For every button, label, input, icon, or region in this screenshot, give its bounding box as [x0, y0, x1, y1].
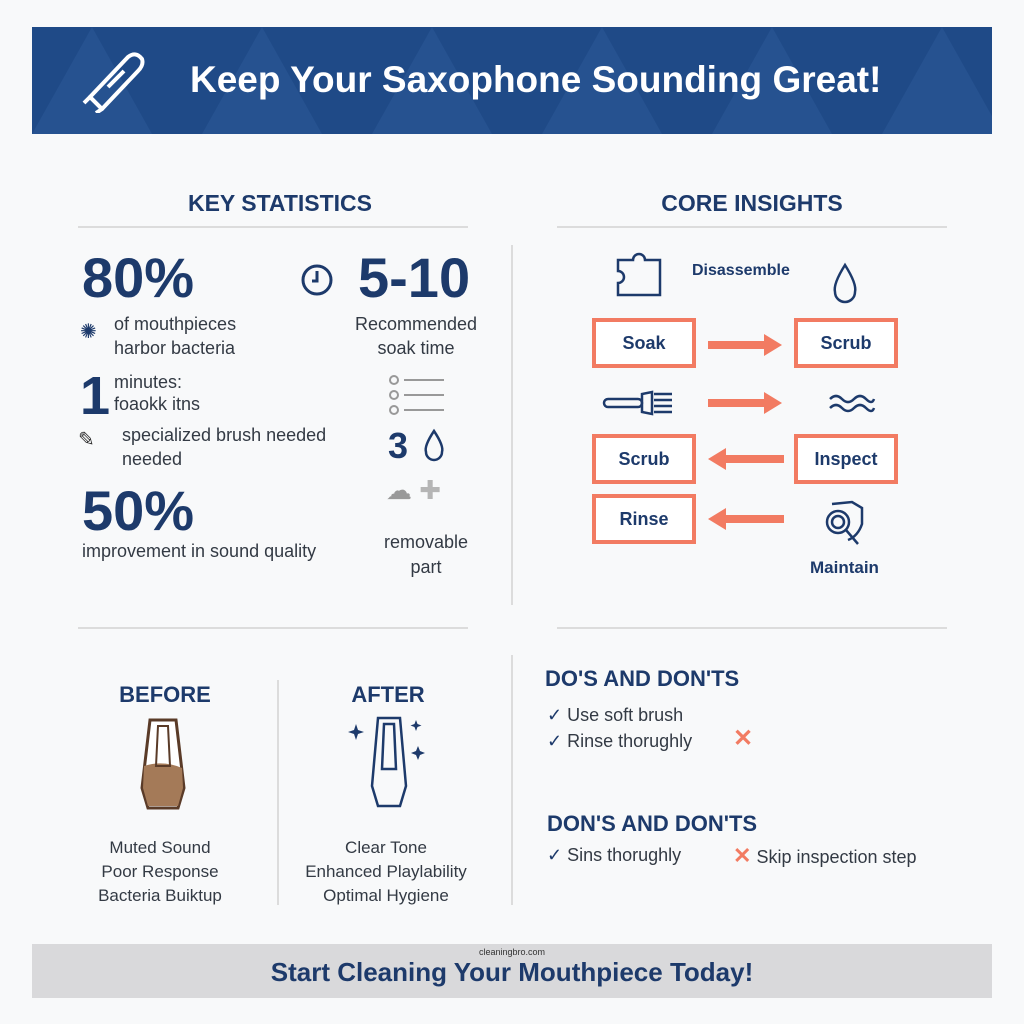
panel: before: BEFORE: [119, 682, 211, 707]
panel: before: Muted Sound: [109, 838, 211, 857]
panel: key statistics: improvement in sound quality: [82, 541, 316, 561]
panel: key statistics: specialized brush needed: [122, 425, 326, 445]
panel: key statistics: Recommended: [355, 314, 477, 334]
panel: key statistics: removable: [384, 532, 468, 552]
panel: key statistics: foaokk itns: [114, 394, 200, 414]
arrow left: [708, 508, 784, 530]
flowchart: Disassemble: [692, 262, 790, 279]
arrow left: [708, 448, 784, 470]
panel: key statistics: of mouthpieces: [114, 314, 236, 334]
brush stat: ✎: [78, 429, 95, 451]
stat 50%: 50%: [82, 479, 194, 542]
panel: dos and donts: DO'S AND DON'TS: [545, 666, 739, 691]
panel: before: Poor Response: [101, 862, 219, 881]
stat 1: 1: [80, 366, 110, 426]
heading: CORE INSIGHTS: [661, 190, 843, 216]
flowchart: [592, 252, 898, 577]
panel: key statistics: harbor bacteria: [114, 338, 235, 358]
icon: mouthpiece: [82, 52, 144, 113]
panel: dos and donts: DON'S AND DON'TS: [547, 811, 757, 836]
panel: dos and donts: ✓ Use soft brush: [547, 705, 683, 725]
panel: after: [305, 682, 467, 905]
panel: after: Enhanced Playlability: [305, 862, 467, 881]
footer: [32, 944, 992, 998]
box soak: [592, 318, 696, 368]
icon brush: [602, 390, 672, 416]
panel: before: [98, 682, 222, 905]
stat 3: 3: [388, 425, 408, 466]
panel: dos and donts: ✕ Skip inspection step: [733, 843, 917, 868]
icon magnifier shield: [826, 500, 864, 545]
icon waves: [829, 394, 876, 412]
header banner: [32, 27, 992, 134]
box scrub: [794, 318, 898, 368]
panel: dos and donts: ✕: [733, 725, 753, 752]
panel: after: AFTER: [351, 682, 425, 707]
box soak: Soak: [622, 332, 666, 352]
icon clock: [302, 264, 332, 296]
box inspect: Inspect: [814, 448, 878, 468]
stat 5-10: 5-10: [358, 246, 470, 309]
stat 80%: 80%: [82, 246, 194, 309]
box scrub 2: [592, 434, 696, 484]
footer: cleaningbro.com: [479, 947, 545, 957]
panel: after: Clear Tone: [345, 838, 427, 857]
box scrub: Scrub: [820, 332, 872, 352]
panel: key statistics: soak time: [377, 338, 455, 358]
icon dirty mouthpiece: [140, 718, 186, 810]
icons puzzle: ☁ ✚: [386, 475, 441, 505]
flowchart: Maintain: [810, 558, 879, 577]
box inspect: [794, 434, 898, 484]
panel: dos and donts: [545, 666, 917, 868]
title: Keep Your Saxophone Sounding Great!: [190, 59, 881, 100]
icon clean mouthpiece: [348, 716, 425, 808]
panel: key statistics: part: [410, 557, 442, 577]
box rinse: [592, 494, 696, 544]
list icon: [389, 375, 444, 415]
panel: key statistics: [78, 190, 477, 577]
arrow: [708, 392, 782, 414]
heading: KEY STATISTICS: [188, 190, 372, 216]
panel: after: Optimal Hygiene: [323, 886, 449, 905]
arrow: [708, 334, 782, 356]
box rinse: Rinse: [619, 508, 669, 528]
footer: Start Cleaning Your Mouthpiece Today!: [271, 957, 753, 987]
panel: key statistics: minutes:: [114, 372, 182, 392]
panel: before: Bacteria Buiktup: [98, 886, 222, 905]
panel: dos and donts: ✓ Sins thorughly: [547, 845, 681, 865]
box scrub 2: Scrub: [618, 448, 670, 468]
panel: key statistics: ✺: [80, 321, 97, 343]
panel: dos and donts: ✓ Rinse thorughly: [547, 731, 692, 751]
icon puzzle: [616, 252, 662, 296]
panel: key statistics: needed: [122, 449, 182, 469]
